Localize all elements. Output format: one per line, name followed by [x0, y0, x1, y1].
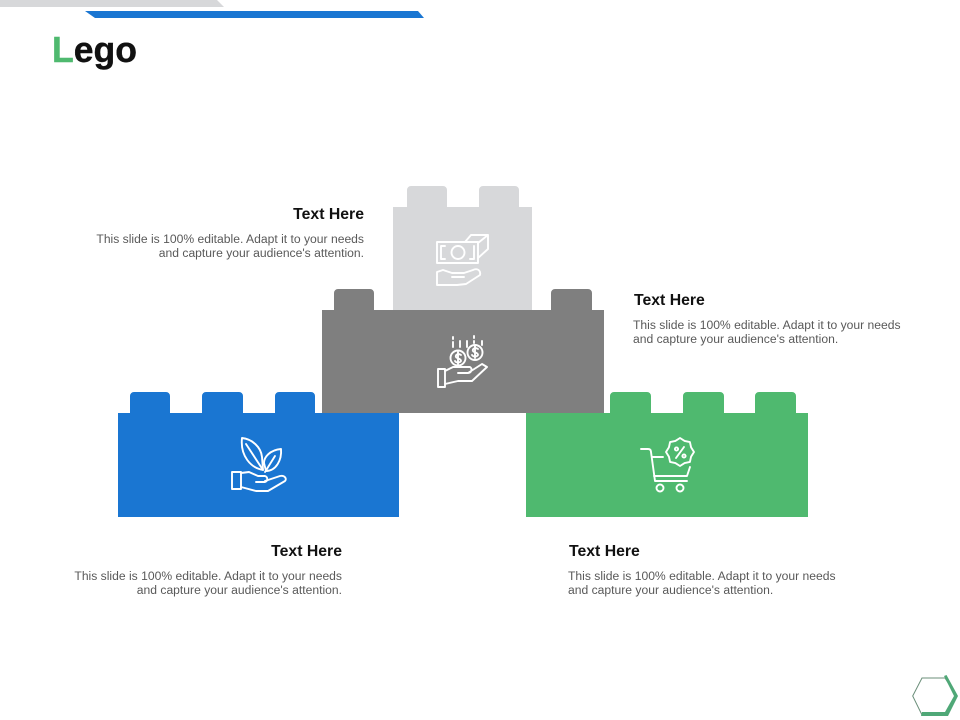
icon: shopping cart with percent badge	[641, 438, 694, 492]
text block: bottom left: and capture your audience's attention.	[137, 583, 342, 597]
icon: corner hexagon	[913, 675, 958, 716]
text block: top right	[633, 292, 901, 346]
brick: light grey (top)	[393, 186, 532, 310]
text block: bottom left: This slide is 100% editable. Adapt it to your needs	[74, 569, 342, 583]
text block: bottom right	[568, 543, 836, 597]
text block: bottom left	[74, 543, 342, 597]
brick: blue (left)	[118, 392, 399, 517]
text block: top right: and capture your audience's attention.	[633, 332, 838, 346]
text block: bottom left: Text Here	[271, 543, 342, 560]
top grey accent bar	[0, 0, 224, 7]
text block: bottom right: and capture your audience's attention.	[568, 583, 773, 597]
brick: green (right)	[526, 392, 808, 517]
brick: dark grey (middle)	[322, 289, 604, 413]
text block: bottom right: This slide is 100% editable. Adapt it to your needs	[568, 569, 836, 583]
icon: money and hand	[437, 235, 488, 285]
text block: top left: and capture your audience's attention.	[159, 246, 364, 260]
title: Lego	[52, 29, 137, 70]
text block: top left: This slide is 100% editable. Adapt it to your needs	[96, 232, 364, 246]
text block: bottom right: Text Here	[569, 543, 640, 560]
text block: top right: This slide is 100% editable. Adapt it to your needs	[633, 318, 901, 332]
text block: top left	[96, 206, 364, 260]
icon: coins falling into hand	[438, 336, 487, 387]
top blue accent bar	[85, 11, 424, 18]
text block: top left: Text Here	[293, 206, 364, 223]
text block: top right: Text Here	[634, 292, 705, 309]
icon: plant and hand	[232, 438, 286, 491]
